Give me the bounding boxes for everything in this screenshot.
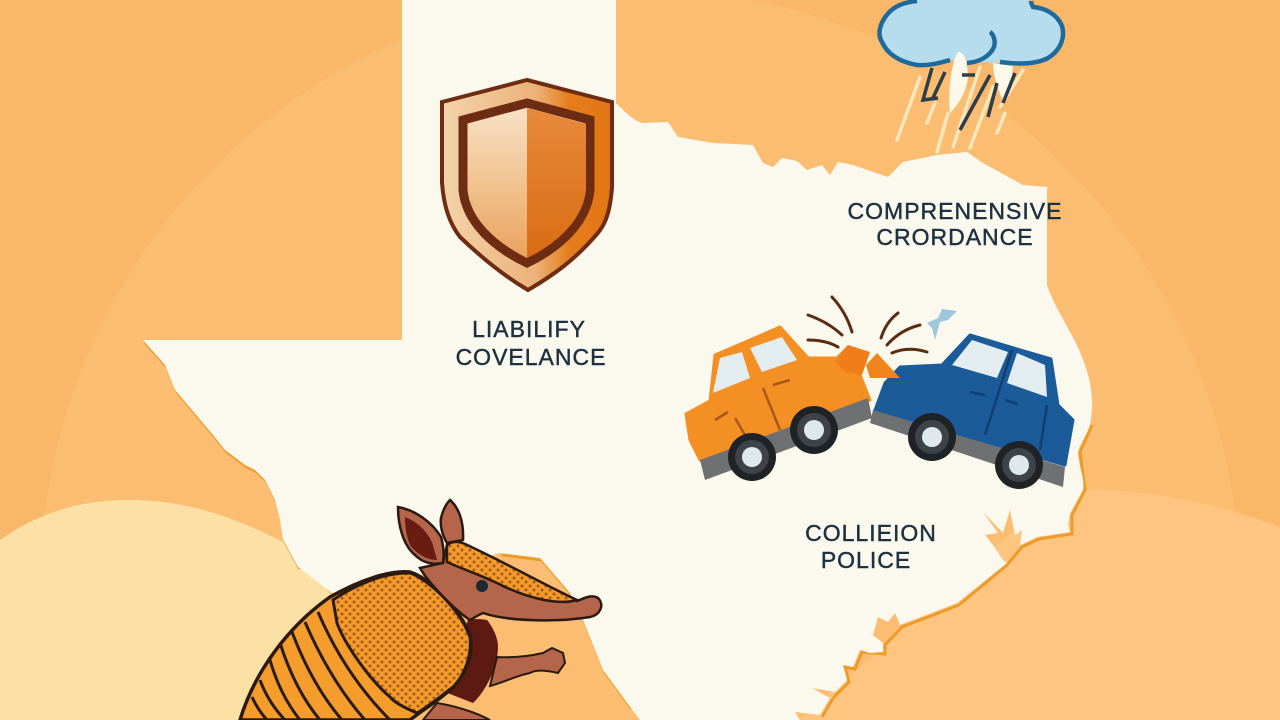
shell dotted plate — [333, 573, 470, 713]
label: collision policy: POLICE — [821, 547, 911, 573]
head — [420, 544, 601, 620]
label: liability coverage: COVELANCE — [456, 344, 606, 370]
icon: shield — [442, 80, 612, 290]
ears — [441, 500, 463, 543]
far leg and belly — [440, 619, 498, 703]
shell bands — [240, 572, 471, 720]
label: comprehensive coverage: COMPRENENSIVE — [848, 198, 1062, 224]
icon: storm cloud — [879, 0, 1063, 152]
label: comprehensive coverage — [848, 198, 1062, 250]
icon: armadillo — [240, 500, 601, 720]
splash — [927, 309, 957, 340]
head armour — [447, 542, 577, 602]
blue car — [866, 335, 1073, 489]
label: collision policy: COLLIEION — [805, 520, 937, 546]
Texas map — [143, 0, 1092, 720]
eye — [476, 580, 488, 592]
icon: car crash — [686, 297, 1073, 489]
label: liability coverage — [456, 316, 606, 370]
impact lines — [808, 297, 927, 353]
label: liability coverage: LIABILIFY — [472, 316, 586, 342]
label: comprehensive coverage: CRORDANCE — [876, 224, 1034, 250]
orange car — [686, 327, 872, 481]
label: collision policy — [805, 520, 937, 573]
